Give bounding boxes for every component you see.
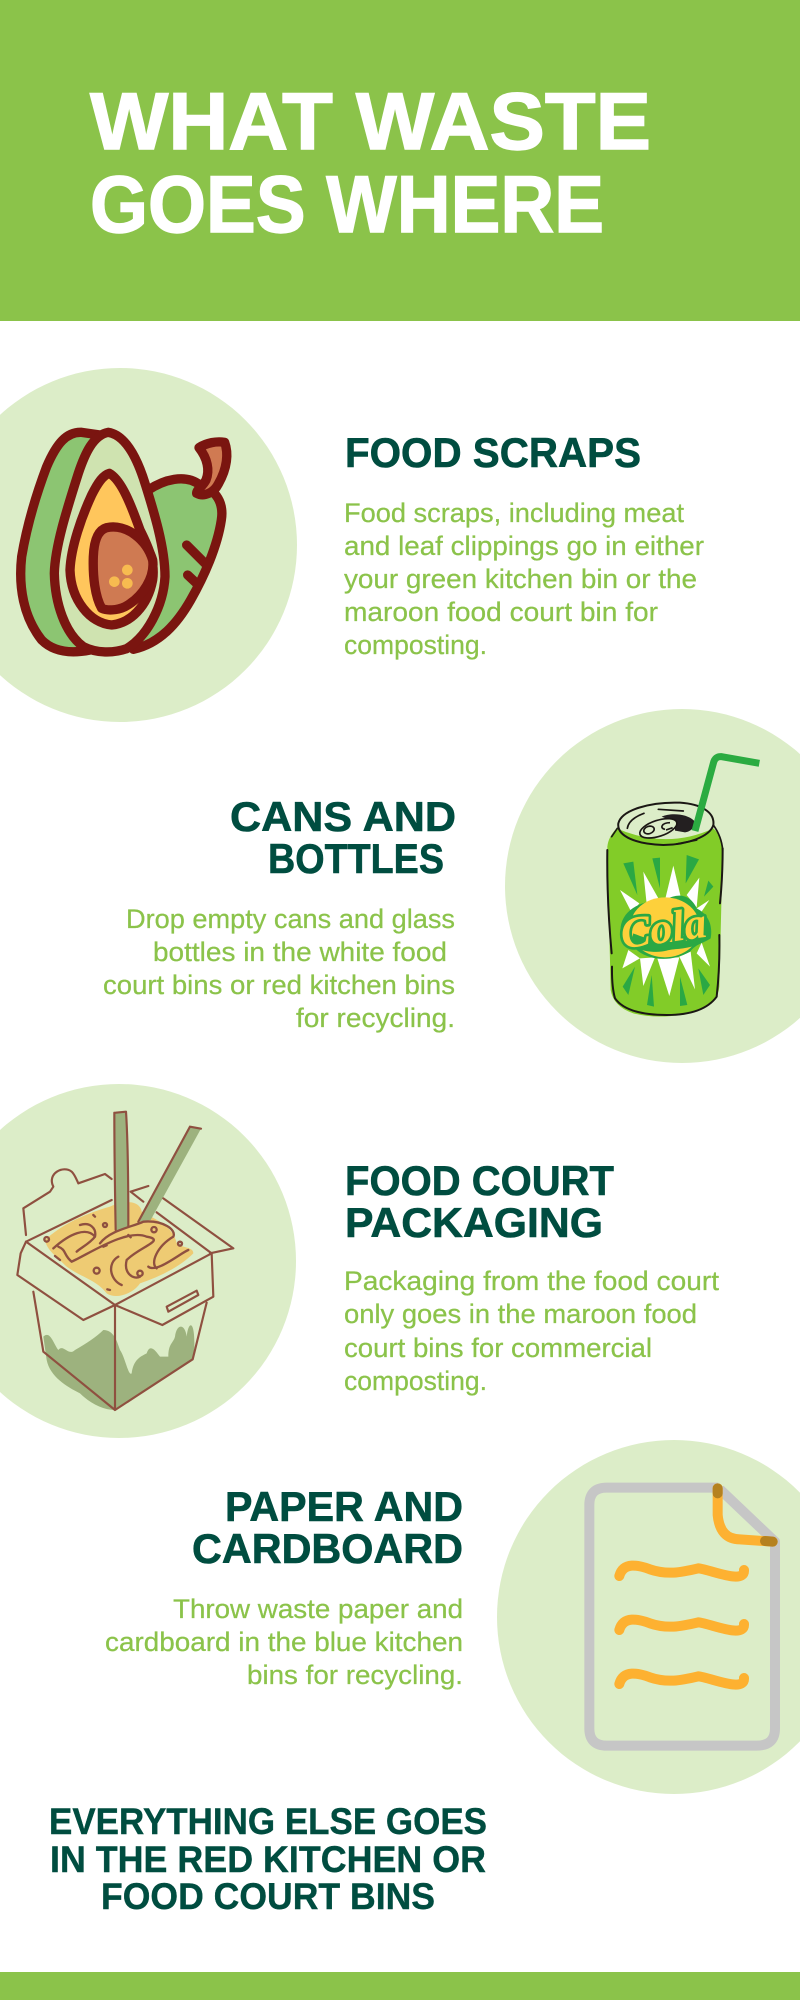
text block: cans and bottles: Drop empty cans and glass: [126, 904, 455, 934]
text block: cans and bottles: for recycling.: [296, 1003, 455, 1033]
text block: food court packaging: court bins for commercial: [344, 1333, 652, 1363]
icon: noodle box in circle: [0, 1084, 296, 1438]
text block: food scraps: and leaf clippings go in either: [344, 531, 704, 561]
text block: paper and cardboard: bins for recycling.: [247, 1660, 463, 1690]
closing statement: [49, 1800, 487, 1917]
heading: cans and bottles: BOTTLES: [268, 835, 444, 882]
footer band: [0, 1972, 800, 2000]
icon: cola can in circle: Cola: [617, 898, 709, 958]
heading: food court packaging: PACKAGING: [345, 1199, 603, 1246]
heading: paper and cardboard: PAPER AND: [225, 1483, 463, 1530]
text block: food court packaging: Packaging from the food court: [344, 1266, 720, 1296]
heading: paper and cardboard: [192, 1483, 463, 1572]
closing statement: EVERYTHING ELSE GOES: [49, 1800, 487, 1842]
text block: food scraps: maroon food court bin for: [344, 597, 658, 627]
panel: food scraps: [0, 368, 704, 722]
text block: food scraps: [344, 498, 704, 660]
header band: [0, 0, 800, 321]
heading: cans and bottles: [230, 793, 456, 882]
text block: paper and cardboard: cardboard in the blue kitchen: [105, 1627, 463, 1657]
heading: cans and bottles: CANS AND: [230, 793, 456, 840]
icon: paper sheet in circle: [497, 1440, 800, 1794]
text block: food scraps: your green kitchen bin or the: [344, 564, 697, 594]
panel: food court packaging: [0, 1084, 720, 1438]
closing statement: IN THE RED KITCHEN OR: [50, 1838, 486, 1880]
panel: cans and bottles: [103, 709, 800, 1063]
icon: cola can in circle: [505, 709, 800, 1063]
title: [90, 77, 651, 250]
title: WHAT WASTE: [90, 77, 651, 167]
heading: food court packaging: [345, 1157, 614, 1246]
text block: paper and cardboard: Throw waste paper and: [173, 1594, 463, 1624]
closing statement: FOOD COURT BINS: [101, 1875, 435, 1917]
title: GOES WHERE: [90, 160, 604, 250]
heading: food scraps: FOOD SCRAPS: [345, 429, 641, 476]
panel: paper and cardboard: [105, 1440, 800, 1794]
text block: cans and bottles: court bins or red kitchen bins: [103, 970, 455, 1000]
icon: avocado in circle: [0, 368, 297, 722]
text block: paper and cardboard: [105, 1594, 463, 1690]
text block: food scraps: composting.: [344, 630, 487, 660]
text block: food court packaging: composting.: [344, 1366, 487, 1396]
heading: food court packaging: FOOD COURT: [345, 1157, 614, 1204]
heading: paper and cardboard: CARDBOARD: [192, 1525, 463, 1572]
text block: food court packaging: only goes in the maroon food: [344, 1299, 697, 1329]
text block: cans and bottles: bottles in the white food: [153, 937, 447, 967]
text block: food scraps: Food scraps, including meat: [344, 498, 685, 528]
text block: food court packaging: [344, 1266, 720, 1396]
text block: cans and bottles: [103, 904, 455, 1033]
